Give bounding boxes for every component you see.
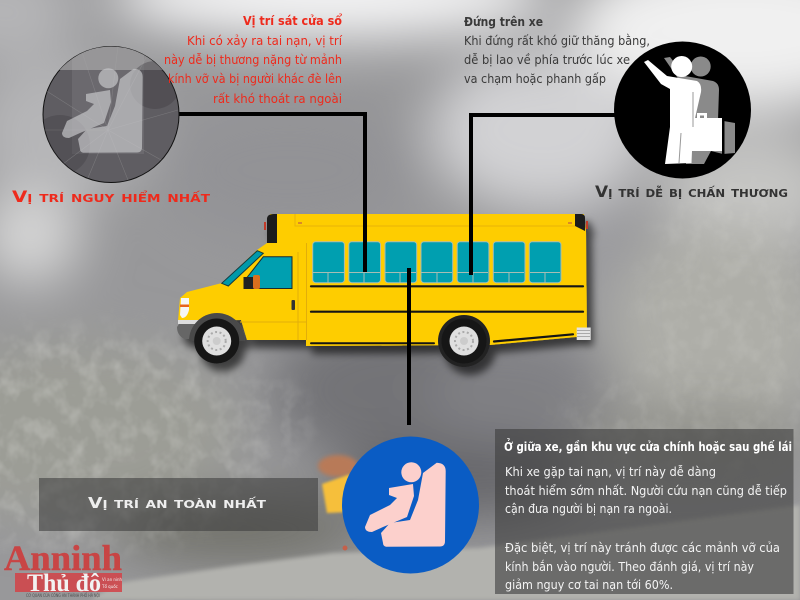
front wheel arch (189, 313, 256, 352)
front wheel (194, 318, 239, 364)
panel line 6: giảm nguy cơ tai nạn tới 60%. (505, 578, 673, 592)
leader line: middle seat (407, 268, 411, 425)
panel line 1: Khi xe gặp tai nạn, vị trí này dễ dàng (505, 465, 716, 479)
fire (318, 455, 358, 550)
icon: safe seat blue circle (342, 436, 479, 574)
panel line 4: Đặc biệt, vị trí này tránh được các mảnh vỡ của (505, 541, 780, 555)
headlight (180, 298, 189, 318)
door handle (292, 300, 295, 310)
logo: An ninh Thu do: Anninh (4, 538, 122, 578)
rear wheel arch (438, 315, 490, 367)
window seat line 3: kính vỡ và bị người khác đè lên (168, 72, 342, 86)
bus windows (313, 242, 561, 283)
icon: standing passengers circle (614, 42, 751, 178)
bus body (178, 214, 587, 346)
seat silhouette (62, 68, 143, 153)
icon: cracked window seat circle (30, 46, 180, 185)
text: window seat (164, 13, 343, 106)
side window (245, 257, 292, 288)
heading: most dangerous seat: Vị trí nguy hiểm nhất (12, 187, 211, 206)
leader line: window seat (178, 114, 365, 272)
black gap around white passenger (722, 118, 724, 154)
standing title: Đứng trên xe (464, 15, 543, 29)
panel: safest label (39, 478, 318, 531)
standing line 3: va chạm hoặc phanh gấp (464, 72, 606, 86)
rear step (577, 328, 591, 340)
window seat line 1: Khi có xảy ra tai nạn, vị trí (187, 34, 343, 48)
leader line: standing (471, 115, 616, 275)
mirror (244, 277, 254, 289)
grey passenger (664, 56, 735, 164)
rear caps (267, 214, 585, 243)
road (90, 505, 800, 600)
panel line 3: cận đưa người bị nạn ra ngoài. (505, 502, 672, 516)
logo: An ninh Thu do: CƠ QUAN CỦA CÔNG AN THÀNH PHỐ HÀ NỘI (26, 593, 100, 598)
text: standing (464, 15, 650, 86)
standing line 1: Khi đứng rất khó giữ thăng bằng, (464, 34, 650, 48)
logo: An ninh Thu do: Vì an ninh (102, 577, 123, 582)
heading: injury-prone position: Vị trí dễ bị chấn thương (595, 182, 788, 201)
white passenger (644, 56, 722, 164)
panel line 2: thoát hiểm sớm nhất. Người cứu nạn cũng dễ tiếp (505, 484, 787, 498)
logo: An ninh Thu do: Tổ quốc (101, 584, 118, 589)
logo: An ninh Thu do (4, 538, 123, 598)
cab details (240, 243, 306, 340)
standing line 2: dễ bị lao về phía trước lúc xe (464, 53, 630, 67)
windshield (222, 251, 263, 286)
bus illustration (177, 214, 591, 369)
front bumper (177, 321, 200, 339)
body stripes (311, 286, 583, 343)
window seat line 4: rất khó thoát ra ngoài (213, 92, 342, 106)
window seat line 2: này dễ bị thương nặng từ mảnh (164, 53, 342, 67)
panel: middle seat explanation (495, 429, 794, 594)
panel line 5: kính bắn vào người. Theo đánh giá, vị trí này (505, 560, 754, 574)
rear wheel (442, 318, 486, 364)
window seat title: Vị trí sát cửa sổ (243, 13, 343, 28)
leader line: window seat, over bus (363, 214, 367, 272)
logo: An ninh Thu do: Thủ đô (27, 570, 101, 597)
safest label text: Vị trí an toàn nhất (88, 494, 267, 512)
